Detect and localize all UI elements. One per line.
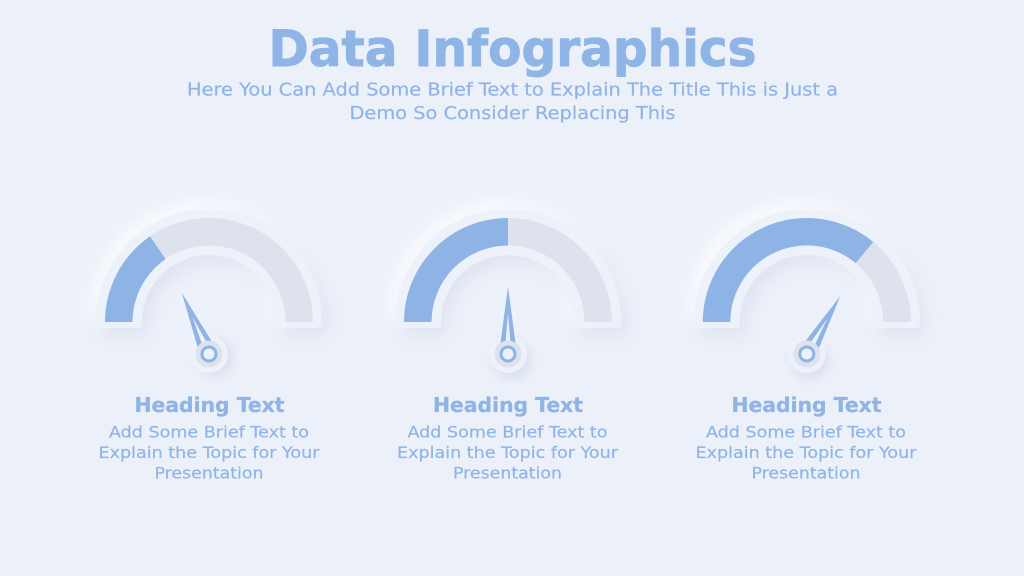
description 2 [397, 422, 618, 483]
panel: gauge 1 [90, 201, 328, 385]
panel: gauge 3 [688, 201, 926, 386]
description 3 [696, 422, 917, 483]
gauge 1 dial [90, 201, 328, 335]
description 3: Presentation [752, 464, 860, 483]
description 1 [98, 422, 320, 483]
description 2: Presentation [453, 464, 562, 483]
gauge 2 dial [389, 201, 627, 335]
title: Data Infographics [268, 20, 756, 78]
text block: column 3 [696, 393, 917, 483]
description 2: Explain the Topic for Your [397, 443, 618, 462]
subtitle [187, 81, 838, 124]
text block: column 1 [98, 393, 320, 483]
text block: column 2 [397, 393, 618, 483]
gauge 3 needle [779, 285, 863, 386]
gauge 2 needle [489, 284, 531, 379]
description 3: Add Some Brief Text to [706, 422, 906, 441]
panel: gauge 2 [389, 201, 627, 379]
gauge 3 dial [688, 201, 926, 335]
subtitle: Demo So Consider Replacing This [350, 104, 676, 124]
heading 3: Heading Text [732, 393, 882, 417]
heading 2: Heading Text [433, 393, 583, 417]
heading 1: Heading Text [134, 393, 285, 417]
description 1: Add Some Brief Text to [109, 422, 309, 441]
gauge 1 needle [163, 281, 240, 385]
subtitle: Here You Can Add Some Brief Text to Explain The Title This is Just a [187, 81, 838, 101]
description 1: Presentation [154, 464, 264, 483]
description 2: Add Some Brief Text to [408, 422, 608, 441]
description 3: Explain the Topic for Your [696, 443, 917, 462]
description 1: Explain the Topic for Your [98, 443, 320, 462]
